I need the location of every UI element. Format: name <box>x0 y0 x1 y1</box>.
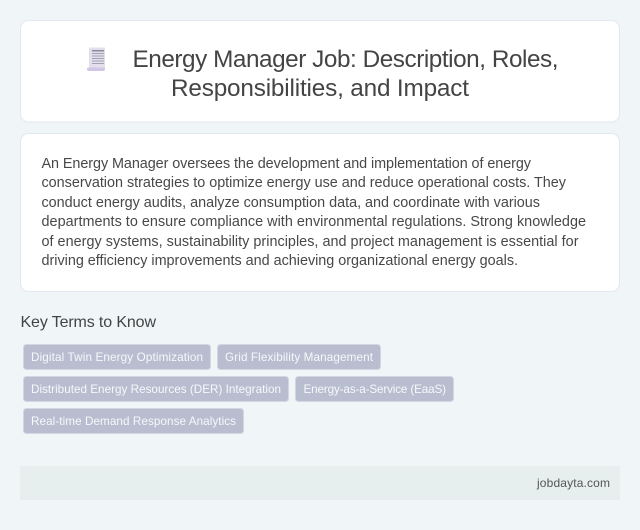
text: description paragraph: driving efficiency improvements and achieving organizational energy goals. <box>42 253 518 269</box>
tag: demand response <box>24 408 244 434</box>
footer bar <box>20 466 620 500</box>
text: description paragraph <box>42 156 586 269</box>
text: description paragraph: An Energy Manager oversees the development and implementation of energy <box>42 156 532 172</box>
panel: description card <box>20 134 620 292</box>
panel: header card <box>20 20 620 122</box>
text: description paragraph: of energy systems, sustainability principles, and project management is essential for <box>42 234 579 250</box>
text: description paragraph: conservation strategies to optimize energy use and reduce operational costs. They <box>42 175 567 191</box>
tag: grid flexibility <box>218 344 380 370</box>
heading: key terms: Key Terms to Know <box>20 314 156 331</box>
text: description paragraph: departments to ensure compliance with environmental regulations. Strong knowledge <box>42 214 586 230</box>
icon: document scroll <box>87 48 105 71</box>
tag: distributed energy <box>24 376 288 402</box>
tag group: key terms <box>24 344 454 434</box>
heading: title line 2: Responsibilities, and Impact <box>171 75 469 102</box>
tag: distributed energy: Distributed Energy Resources (DER) Integration <box>31 383 281 396</box>
tag: energy as a service: Energy-as-a-Service (EaaS) <box>304 383 446 396</box>
tag: grid flexibility: Grid Flexibility Management <box>225 351 374 364</box>
tag: demand response: Real-time Demand Response Analytics <box>31 415 236 428</box>
heading: title line 1: Energy Manager Job: Description, Roles, <box>132 46 558 73</box>
tag: digital twin: Digital Twin Energy Optimization <box>31 351 203 364</box>
tag: digital twin <box>24 344 210 370</box>
text: footer source: jobdayta.com <box>536 476 610 490</box>
text: description paragraph: conduct energy audits, analyze consumption data, and coordinate with various <box>42 195 540 211</box>
tag: energy as a service <box>296 376 454 402</box>
